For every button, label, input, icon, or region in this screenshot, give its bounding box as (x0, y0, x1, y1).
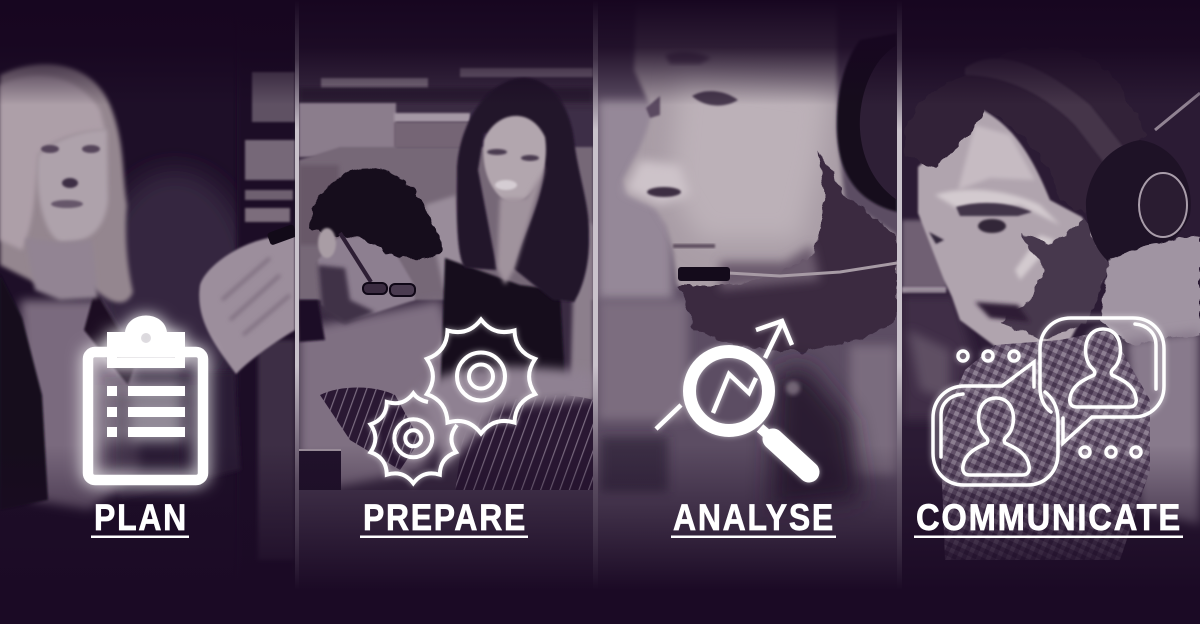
dots upper (958, 351, 968, 361)
dots lower (1080, 447, 1090, 457)
heading: prepare: PREPARE (363, 497, 527, 538)
panel dividers (295, 0, 902, 590)
left person (963, 398, 1029, 475)
panel: analyse photo (598, 18, 897, 572)
icon: gears (370, 320, 535, 483)
panel: plan photo (0, 62, 295, 556)
small gear (370, 393, 457, 483)
right person (1070, 329, 1136, 407)
large gear (427, 320, 535, 434)
panel: prepare photo (299, 54, 593, 566)
heading: plan: PLAN (94, 497, 188, 538)
left bubble (933, 362, 1058, 485)
icon: chat bubbles (933, 318, 1164, 485)
top fade (0, 0, 1200, 105)
bottom fade (0, 445, 1200, 590)
icon: clipboard (88, 316, 203, 480)
right bubble (1040, 318, 1164, 443)
icon: magnifier with chart (656, 321, 809, 472)
heading: analyse: ANALYSE (673, 497, 835, 538)
panel: communicate photo (902, 58, 1200, 560)
